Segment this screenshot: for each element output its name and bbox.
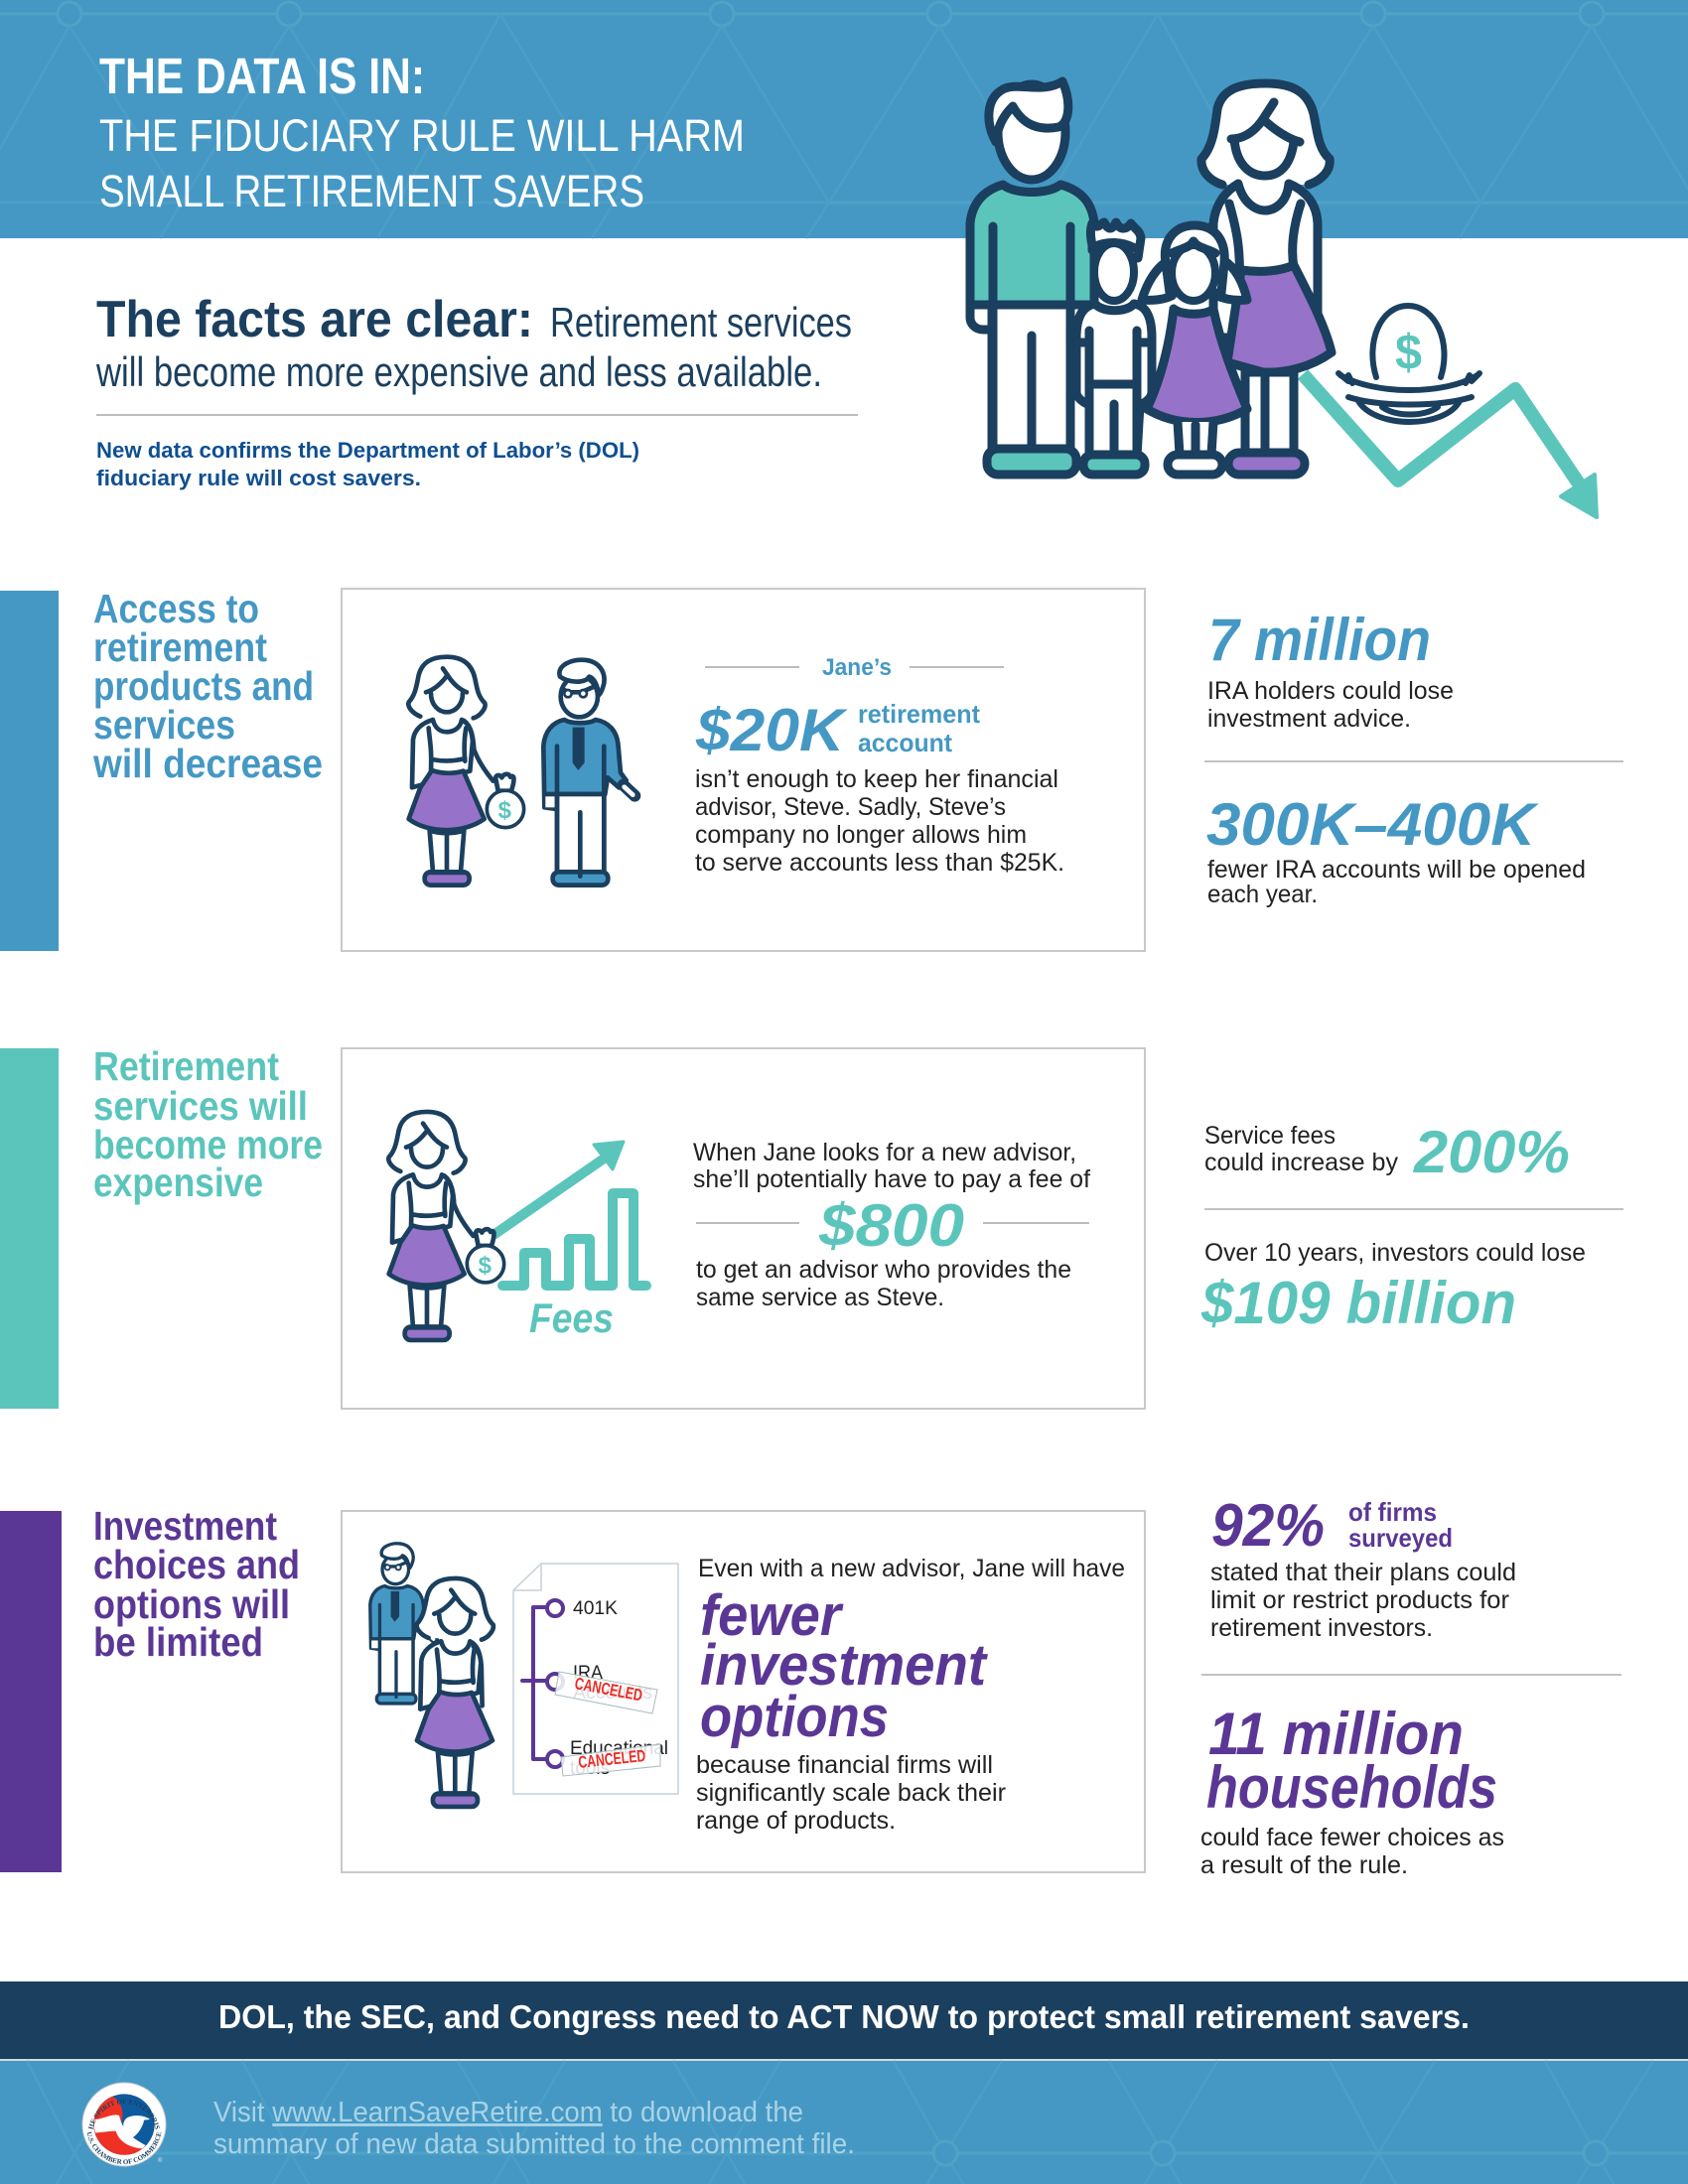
text: fewer investment options: Even with a new advisor, Jane will have [698,1555,1125,1582]
stats: access: investment advice. [1207,705,1411,733]
text: visit link: Visit www.LearnSaveRetire.com to download the [213,2097,803,2128]
heading: services more expensive: Retirement [93,1043,279,1089]
stats: access: 7 million [1208,607,1431,673]
stats: limited choices: of firms [1348,1497,1437,1527]
title: THE FIDUCIARY RULE WILL HARM [99,110,745,161]
text: fewer investment options: because financial firms will [696,1751,993,1779]
text: new advisor fee: she’ll potentially have to pay a fee of [693,1165,1090,1193]
bar: section 1 marker [0,591,59,951]
intro text block: New data confirms the Department of Labor’s (DOL) [96,438,639,463]
text: fewer investment options: fewer [700,1583,844,1648]
document: product list: IRA [573,1663,603,1684]
stats: access: 300K–400K [1206,791,1539,858]
stats: limited choices: 11 million [1208,1701,1464,1767]
stats: limited choices [1200,1492,1621,1879]
icon: father [970,81,1094,475]
heading: services more expensive: services will [93,1083,308,1129]
intro text block [95,291,858,490]
heading: investment choices limited: options will [93,1581,290,1627]
logo: U.S. Chamber of Commerce seal: U.S. CHAMBER OF COMMERCE [87,2131,161,2164]
text: new advisor fee: When Jane looks for a new advisor, [693,1139,1076,1166]
icon: Jane with money bag [388,1112,504,1340]
icon: Jane with money bag: $ [498,797,511,824]
stats: fees [1200,1119,1623,1336]
stats: limited choices: retirement investors. [1210,1614,1433,1642]
stats: limited choices: 92% [1211,1492,1325,1559]
panel: header band [0,0,1688,238]
text: Jane's story: to serve accounts less than $25K. [695,849,1064,877]
stats: access: IRA holders could lose [1207,677,1454,705]
text: fewer investment options [696,1555,1125,1835]
label: canceled sticker IRA: CANCELED [573,1674,644,1706]
icon: Steve the advisor [543,660,634,886]
document: product list [513,1564,678,1794]
text: visit link: summary of new data submitted to the comment file. [213,2128,855,2160]
arrow: rising fees [493,1142,624,1235]
label: canceled sticker educational tools [561,1744,660,1776]
heading: investment choices limited: be limited [93,1619,263,1665]
icon: daughter [1142,225,1247,475]
title: SMALL RETIREMENT SAVERS [99,166,644,216]
stats: limited choices: limit or restrict products for [1210,1586,1509,1614]
heading: access will decrease: retirement [93,624,267,670]
heading: access will decrease: services [93,702,235,748]
text: Jane's story [695,765,1064,877]
stats: limited choices: surveyed [1348,1523,1453,1553]
panel: fees card [342,1048,1145,1409]
heading: services more expensive: expensive [93,1160,263,1205]
stats: access: each year. [1207,881,1318,908]
icon: Steve and Jane [370,1544,493,1807]
stat: $20K account: $20K [695,697,848,763]
stat: $20K account: retirement [858,699,980,729]
heading: investment choices limited: Investment [93,1503,277,1549]
heading: investment choices limited [93,1503,300,1665]
logo: U.S. Chamber of Commerce seal: ® [158,2157,163,2164]
heading: access will decrease: will decrease [92,741,323,786]
bar: section 3 marker [0,1511,62,1872]
stats: limited choices: stated that their plans could [1210,1559,1516,1586]
text: new advisor fee: same service as Steve. [696,1284,944,1311]
stats: fees: $109 billion [1200,1270,1516,1336]
heading: services more expensive [93,1043,323,1205]
heading: access will decrease: products and [93,663,314,709]
stat: $20K account: account [858,728,952,757]
panel: fewer options card [342,1511,1145,1872]
logo: U.S. Chamber of Commerce seal [81,2083,167,2166]
stats: limited choices: could face fewer choices as [1200,1824,1504,1851]
stats: fees: could increase by [1204,1149,1398,1176]
document: product list: Educational [570,1738,668,1759]
heading: access will decrease [92,586,323,786]
document: product list: Accounts [573,1683,652,1704]
panel: Jane's account card [342,589,1145,951]
text: Jane's story: isn’t enough to keep her financial [695,765,1058,793]
stats: fees: Over 10 years, investors could lose [1204,1239,1586,1267]
text: fewer investment options: range of products. [696,1807,896,1835]
chart: fee steps [502,1193,646,1286]
heading: access will decrease: Access to [93,586,259,631]
text: Jane's story: company no longer allows him [695,821,1027,849]
intro text block: will become more expensive and less available. [95,348,822,395]
intro text block: The facts are clear: [96,291,533,348]
stats: access [1204,607,1623,908]
heading: investment choices limited: choices and [93,1542,300,1587]
heading: services more expensive: become more [93,1122,323,1167]
stats: fees: 200% [1413,1119,1570,1185]
text: fewer investment options: significantly scale back their [696,1779,1006,1807]
icon: nest egg [1338,306,1479,422]
text: Jane's story: advisor, Steve. Sadly, Steve’s [695,793,1006,821]
text: fewer investment options: options [700,1685,889,1749]
stats: limited choices: households [1206,1754,1497,1821]
arrow: falling trend line [1303,374,1597,517]
document: product list: tools [570,1758,610,1779]
stats: limited choices: a result of the rule. [1200,1851,1408,1879]
icon: mother [1201,83,1332,475]
intro text block: Retirement services [550,299,852,345]
icon: Jane with money bag [408,657,524,886]
stats: fees: Service fees [1204,1122,1336,1150]
icon: son [1076,222,1152,475]
label: canceled sticker IRA [555,1672,657,1713]
text: new advisor fee: to get an advisor who provides the [696,1256,1071,1284]
text: visit link [213,2097,855,2160]
bar: section 2 marker [0,1048,59,1409]
label: fees: Fees [529,1295,614,1341]
panel: call to action band: DOL, the SEC, and Congress need to ACT NOW to protect small retirement savers. [218,1998,1470,2035]
text: new advisor fee [693,1139,1090,1311]
stat: $20K account [695,697,980,763]
stats: access: fewer IRA accounts will be opened [1207,856,1586,884]
text: fewer investment options: investment [700,1633,989,1698]
icon: Jane with money bag: $ [479,1252,492,1279]
title: THE DATA IS IN: [99,48,425,104]
panel: call to action band [0,1981,1688,2059]
icon: family illustration [970,81,1332,475]
title [99,48,745,216]
logo: U.S. Chamber of Commerce seal: THE SPIRIT OF ENTERPRISE [88,2099,160,2130]
label: canceled sticker educational tools: CANCELED [577,1746,646,1772]
intro text block: fiduciary rule will cost savers. [96,466,421,490]
icon: nest egg: $ [1395,325,1422,380]
text: Jane's label: Jane’s [822,654,892,681]
text: new advisor fee: $800 [818,1192,964,1259]
document: product list: 401K [573,1598,618,1619]
